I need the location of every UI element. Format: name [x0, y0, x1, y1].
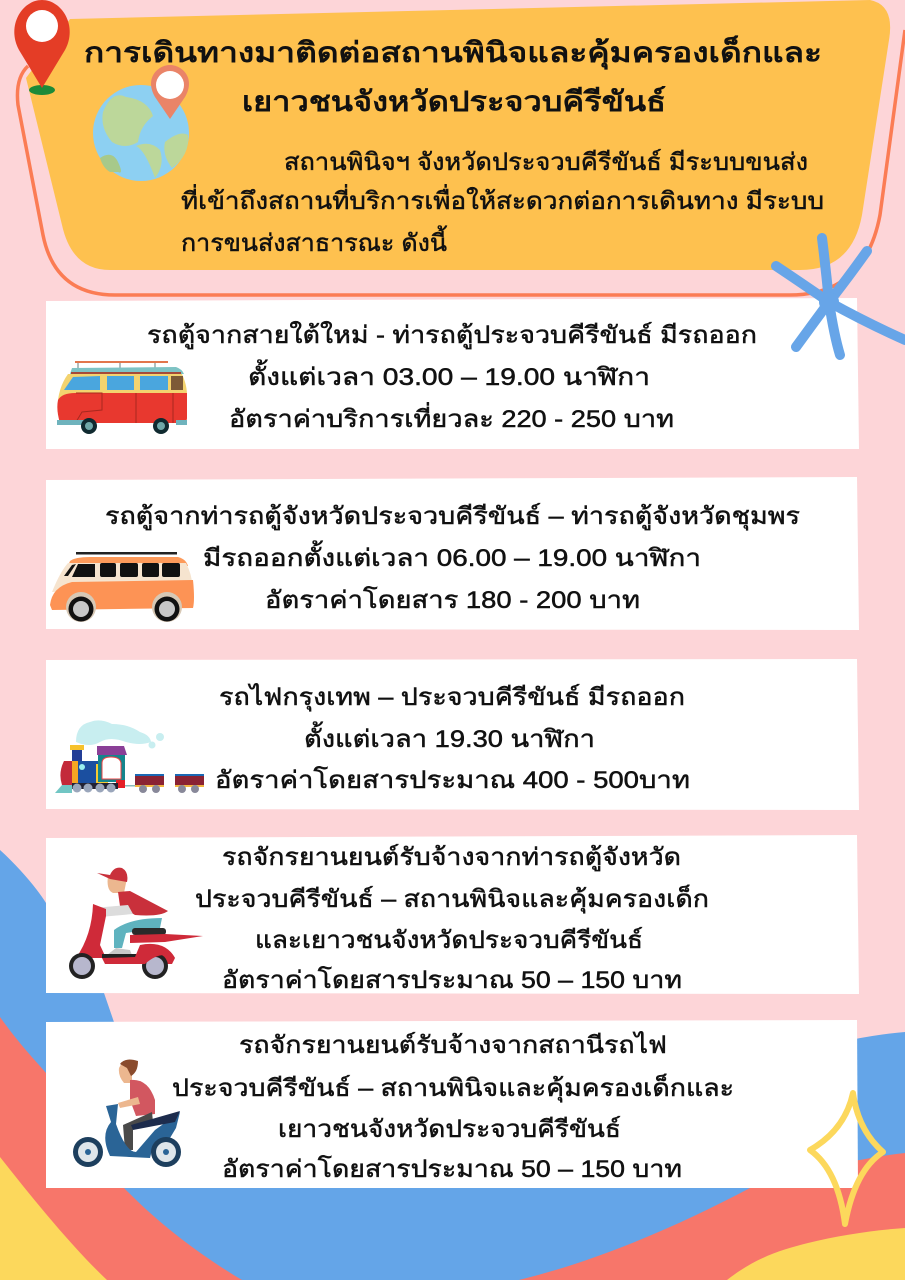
route text: รถจักรยานยนต์รับจ้างจากท่ารถตู้จังหวัด [222, 843, 681, 872]
route text: รถจักรยานยนต์รับจ้างจากสถานีรถไฟ [239, 1031, 667, 1059]
route text: อัตราค่าโดยสาร 180 - 200 บาท [265, 586, 640, 614]
route text: อัตราค่าโดยสารประมาณ 50 – 150 บาท [222, 966, 682, 994]
route text: ประจวบคีรีขันธ์ – สถานพินิจและคุ้มครองเด็กและ [172, 1073, 734, 1103]
intro text: การขนส่งสาธารณะ ดังนี้ [181, 225, 447, 257]
icon: red scooter rider [69, 868, 203, 979]
route text [105, 502, 800, 614]
route text: ประจวบคีรีขันธ์ – สถานพินิจและคุ้มครองเด็ก [195, 884, 709, 914]
route text: อัตราค่าโดยสารประมาณ 400 - 500บาท [215, 766, 690, 794]
route text: อัตราค่าบริการเที่ยวละ 220 - 250 บาท [229, 402, 674, 433]
icon: globe with pin [93, 65, 189, 181]
route text: เยาวชนจังหวัดประจวบคีรีขันธ์ [278, 1115, 621, 1143]
icon: red van [57, 361, 187, 434]
icon: blue star scribble [776, 238, 905, 355]
title: เยาวชนจังหวัดประจวบคีรีขันธ์ [242, 86, 666, 117]
route text: มีรถออกตั้งแต่เวลา 06.00 – 19.00 นาฬิกา [203, 540, 701, 572]
header panel [26, 0, 890, 270]
title [84, 35, 822, 117]
route text: ตั้งแต่เวลา 19.30 นาฬิกา [304, 721, 595, 753]
panel: motorcycle from railway station [46, 1020, 858, 1188]
panel: train from Bangkok [46, 659, 859, 810]
header outline [17, 30, 905, 295]
route text: รถตู้จากท่ารถตู้จังหวัดประจวบคีรีขันธ์ – ท่ารถตู้จังหวัดชุมพร [105, 502, 800, 531]
icon: red map pin [14, 0, 70, 95]
route text: ตั้งแต่เวลา 03.00 – 19.00 นาฬิกา [248, 359, 650, 391]
title: การเดินทางมาติดต่อสถานพินิจและคุ้มครองเด็กและ [84, 35, 822, 70]
route text [195, 843, 709, 994]
route text [172, 1031, 734, 1183]
icon: train [55, 720, 204, 793]
route text: อัตราค่าโดยสารประมาณ 50 – 150 บาท [222, 1155, 682, 1183]
route text: และเยาวชนจังหวัดประจวบคีรีขันธ์ [255, 926, 643, 954]
panel: van from Prachuap to Chumphon [46, 477, 859, 630]
intro text: ที่เข้าถึงสถานที่บริการเพื่อให้สะดวกต่อการเดินทาง มีระบบ [181, 184, 824, 215]
route text [215, 683, 690, 794]
icon: blue scooter rider [73, 1060, 181, 1167]
route text: รถไฟกรุงเทพ – ประจวบคีรีขันธ์ มีรถออก [219, 683, 685, 712]
icon: yellow sparkle [810, 1093, 883, 1224]
route text [147, 321, 757, 433]
intro text: สถานพินิจฯ จังหวัดประจวบคีรีขันธ์ มีระบบขนส่ง [284, 148, 808, 176]
icon: orange van [50, 552, 194, 622]
panel: van from Sai Tai Mai [46, 298, 859, 449]
panel: motorcycle from van terminal [46, 835, 859, 994]
route text: รถตู้จากสายใต้ใหม่ - ท่ารถตู้ประจวบคีรีขันธ์ มีรถออก [147, 321, 757, 350]
intro text [181, 148, 824, 257]
